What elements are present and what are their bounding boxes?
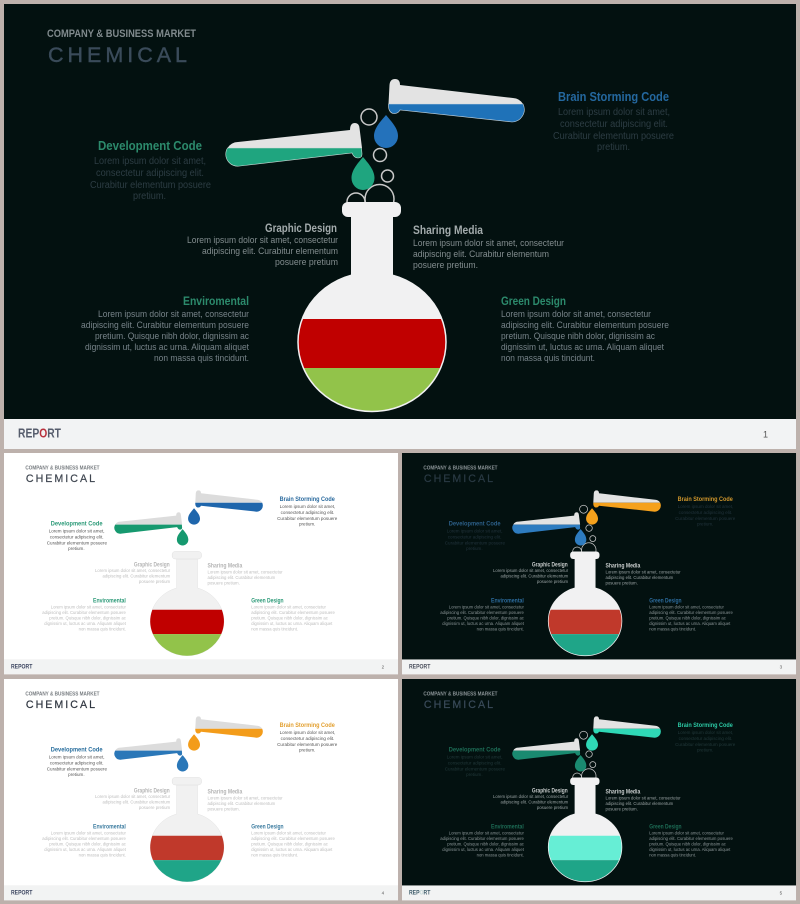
bubbles [573,731,596,783]
label: Enviromental: pretium. Quisque nibh dolor, dignissim ac [447,616,524,622]
footer bar: REPORT [409,664,431,671]
icon: blue test tube [512,512,580,534]
label: Green Design: non massa quis tincidunt. [649,853,696,859]
flask [548,778,622,882]
icon: blue test tube [114,738,182,760]
label: Graphic Design [493,562,569,585]
label: Brain Storming Code: pretium. [597,142,630,153]
label: Green Design: non massa quis tincidunt. [649,627,696,633]
label: Development Code: Development Code [449,747,501,754]
label: Development Code: pretium. [68,772,85,778]
icon: light teal test tube [593,716,661,738]
label: Green Design: dignissim ut, luctus ac urna. Aliquam aliquet [501,342,664,353]
label: Brain Storming Code: consectetur adipiscing elit. [560,119,668,130]
label: Sharing Media: Lorem ipsum dolor sit amet, consectetur [207,569,283,575]
label: Development Code: Curabitur elementum posuere [47,767,107,773]
label: Sharing Media: adipiscing elit. Curabitur elementum [207,801,275,807]
label: Enviromental [42,825,126,859]
label: Development Code [445,747,505,778]
icon: green drop [352,157,374,190]
label: Sharing Media: Lorem ipsum dolor sit amet, consectetur [605,569,681,575]
flask [298,202,446,412]
label: Green Design [251,825,335,859]
label: Sharing Media [413,223,564,271]
label: Sharing Media: posuere pretium. [207,806,240,812]
label: Graphic Design: posuere pretium [537,805,568,811]
title: CHEMICAL [48,43,187,67]
label: Enviromental: dignissim ut, luctus ac urna. Aliquam aliquet [442,847,524,853]
label: Graphic Design: posuere pretium [537,579,568,585]
subtitle: COMPANY & BUSINESS MARKET [423,465,498,471]
label: Development Code: Development Code [98,139,202,153]
flask [150,778,224,882]
slide background [4,679,398,885]
label: Graphic Design: Graphic Design [134,788,170,794]
title: CHEMICAL [26,699,95,711]
icon: blue test tube [195,490,263,512]
footer bar: 4 [382,891,385,896]
label: Brain Storming Code: consectetur adipiscing elit. [679,510,732,516]
label: Enviromental [440,825,524,859]
label: Enviromental: Lorem ipsum dolor sit amet, consectetur [449,831,524,837]
label: Enviromental: Enviromental [93,825,126,831]
label: Green Design: adipiscing elit. Curabitur elementum posuere [649,836,733,842]
label: Green Design: non massa quis tincidunt. [251,853,298,859]
label: Sharing Media [207,789,283,812]
label: Graphic Design [95,788,171,811]
label: Graphic Design: adipiscing elit. Curabitur elementum [501,573,568,579]
label: Enviromental: Lorem ipsum dolor sit amet, consectetur [449,605,524,611]
label: Brain Storming Code: Brain Storming Code [558,90,669,104]
label: Graphic Design: Graphic Design [134,562,170,568]
label: Enviromental: Lorem ipsum dolor sit amet, consectetur [51,831,126,837]
footer bar [4,419,796,449]
label: Development Code: consectetur adipiscing elit. [50,761,104,767]
label: Enviromental: non massa quis tincidunt. [79,627,126,633]
label: Sharing Media: adipiscing elit. Curabitur elementum [413,249,549,260]
label: Brain Storming Code [553,90,674,153]
title: CHEMICAL [26,473,95,485]
label: Graphic Design: posuere pretium [275,257,338,268]
label: Enviromental: non massa quis tincidunt. [79,853,126,859]
label: Green Design [251,599,335,633]
label: Brain Storming Code: Brain Storming Code [678,722,733,729]
label: Brain Storming Code: pretium. [697,748,713,754]
label: Graphic Design: adipiscing elit. Curabitur elementum [202,246,338,257]
bubbles [573,505,596,557]
label: Sharing Media [605,789,681,812]
label: Graphic Design: Lorem ipsum dolor sit amet, consectetur [95,794,171,800]
title: CHEMICAL [424,699,493,711]
label: Brain Storming Code: Lorem ipsum dolor sit amet, [678,504,733,510]
icon: orange test tube [593,490,661,512]
label: Enviromental: adipiscing elit. Curabitur elementum posuere [42,836,126,842]
footer bar: 2 [382,665,385,670]
label: Enviromental: Enviromental [93,599,126,605]
label: Enviromental [42,599,126,633]
label: Enviromental: pretium. Quisque nibh dolor, dignissim ac [95,331,249,342]
label: Brain Storming Code [277,496,338,528]
label: Enviromental: Enviromental [491,825,524,831]
label: Enviromental: adipiscing elit. Curabitur elementum posuere [440,610,524,616]
label: Development Code: pretium. [466,772,483,778]
label: Enviromental: non massa quis tincidunt. [477,853,524,859]
icon: blue drop [575,529,586,546]
label: Development Code: Lorem ipsum dolor sit amet, [94,156,206,167]
label: Development Code: pretium. [133,191,166,202]
label: Graphic Design: posuere pretium [139,805,170,811]
label: Graphic Design: Lorem ipsum dolor sit amet, consectetur [493,568,569,574]
label: Green Design: dignissim ut, luctus ac urna. Aliquam aliquet [649,621,731,627]
label: Enviromental: Lorem ipsum dolor sit amet, consectetur [98,309,249,320]
label: Green Design: Green Design [649,825,682,831]
label: Sharing Media: Sharing Media [605,563,641,569]
label: Development Code [47,521,107,552]
footer bar [402,885,796,900]
label: Sharing Media: Lorem ipsum dolor sit amet, consectetur [413,238,564,249]
label: Enviromental: dignissim ut, luctus ac urna. Aliquam aliquet [442,621,524,627]
subtitle: COMPANY & BUSINESS MARKET [25,465,100,471]
label: Green Design: pretium. Quisque nibh dolor, dignissim ac [649,842,726,848]
label: Enviromental: dignissim ut, luctus ac urna. Aliquam aliquet [85,342,249,353]
label: Development Code: Lorem ipsum dolor sit amet, [447,755,502,761]
icon: blue drop [177,755,188,772]
icon: blue test tube [388,79,524,122]
label: Brain Storming Code: pretium. [299,522,315,528]
label: Sharing Media: Sharing Media [413,223,483,237]
label: Green Design: pretium. Quisque nibh dolor, dignissim ac [251,616,328,622]
label: Development Code: Development Code [51,521,103,528]
subtitle: COMPANY & BUSINESS MARKET [25,691,100,697]
slide background [4,4,796,419]
label: Graphic Design: Lorem ipsum dolor sit amet, consectetur [95,568,171,574]
label: Enviromental: non massa quis tincidunt. [154,353,249,364]
flask [150,552,224,656]
label: Development Code: Curabitur elementum posuere [445,767,505,773]
label: Green Design: Green Design [251,599,284,605]
label: Brain Storming Code: Curabitur elementum posuere [675,742,736,748]
icon: orange drop [586,508,598,525]
label: Enviromental: adipiscing elit. Curabitur elementum posuere [42,610,126,616]
label: Graphic Design: Lorem ipsum dolor sit amet, consectetur [493,794,569,800]
label: Development Code: Curabitur elementum posuere [47,541,107,547]
icon: green drop [177,529,188,546]
label: Brain Storming Code: Brain Storming Code [280,496,335,503]
label: Brain Storming Code [277,722,338,754]
label: Graphic Design: Graphic Design [265,221,337,235]
label: Development Code: Development Code [449,521,501,528]
slide 2: light [4,453,398,674]
icon: blue drop [188,508,200,525]
label: Green Design: adipiscing elit. Curabitur elementum posuere [649,610,733,616]
label: Enviromental [440,599,524,633]
label: Sharing Media: Sharing Media [207,563,243,569]
label: Graphic Design: adipiscing elit. Curabitur elementum [501,799,568,805]
label: Green Design: dignissim ut, luctus ac urna. Aliquam aliquet [251,847,333,853]
label: Enviromental [81,294,249,364]
label: Brain Storming Code: Brain Storming Code [280,722,335,729]
label: Development Code: consectetur adipiscing elit. [448,535,502,541]
label: Sharing Media: Lorem ipsum dolor sit amet, consectetur [207,795,283,801]
label: Graphic Design: Graphic Design [532,562,568,568]
subtitle: COMPANY & BUSINESS MARKET [423,691,498,697]
label: Brain Storming Code: Curabitur elementum posuere [277,742,338,748]
label: Green Design: non massa quis tincidunt. [251,627,298,633]
label: Development Code [445,521,505,552]
label: Brain Storming Code [675,722,736,754]
label: Brain Storming Code [675,496,736,528]
slide 4: light orange and blue [4,679,398,900]
label: Graphic Design: Graphic Design [532,788,568,794]
label: Graphic Design [187,221,338,268]
label: Green Design [649,599,733,633]
label: Sharing Media: Sharing Media [207,789,243,795]
footer bar [4,659,398,674]
icon: green test tube [114,512,182,534]
label: Sharing Media: posuere pretium. [413,260,478,271]
label: Brain Storming Code: pretium. [697,522,713,528]
label: Brain Storming Code: Lorem ipsum dolor sit amet, [280,730,335,736]
subtitle: COMPANY & BUSINESS MARKET [47,28,196,40]
label: Brain Storming Code: consectetur adipiscing elit. [281,736,334,742]
label: Development Code: pretium. [68,546,85,552]
label: Brain Storming Code: pretium. [299,748,315,754]
label: Sharing Media: posuere pretium. [605,580,638,586]
label: Enviromental: adipiscing elit. Curabitur elementum posuere [440,836,524,842]
label: Sharing Media: adipiscing elit. Curabitur elementum [605,801,673,807]
label: Sharing Media: posuere pretium. [605,806,638,812]
label: Brain Storming Code: consectetur adipiscing elit. [281,510,334,516]
footer bar: REPORT [11,664,33,671]
label: Enviromental: dignissim ut, luctus ac urna. Aliquam aliquet [44,621,126,627]
label: Green Design: dignissim ut, luctus ac urna. Aliquam aliquet [649,847,731,853]
icon: orange test tube [195,716,263,738]
label: Green Design: Lorem ipsum dolor sit amet, consectetur [649,831,724,837]
label: Sharing Media: posuere pretium. [207,580,240,586]
label: Green Design [501,294,669,364]
label: Green Design: pretium. Quisque nibh dolor, dignissim ac [251,842,328,848]
icon: dark teal drop [575,755,586,772]
label: Green Design: pretium. Quisque nibh dolor, dignissim ac [649,616,726,622]
label: Enviromental: pretium. Quisque nibh dolor, dignissim ac [49,616,126,622]
label: Green Design [649,825,733,859]
label: Enviromental: pretium. Quisque nibh dolor, dignissim ac [49,842,126,848]
slide 5: dark teal [402,679,796,900]
label: Brain Storming Code: consectetur adipiscing elit. [679,736,732,742]
label: Green Design: dignissim ut, luctus ac urna. Aliquam aliquet [251,621,333,627]
footer bar [402,659,796,674]
label: Green Design: non massa quis tincidunt. [501,353,595,364]
label: Graphic Design: Lorem ipsum dolor sit amet, consectetur [187,235,338,246]
slide background [402,679,796,885]
label: Enviromental: Enviromental [491,599,524,605]
label: Development Code [47,747,107,778]
icon: orange drop [188,734,200,751]
icon: light teal drop [586,734,598,751]
label: Enviromental: pretium. Quisque nibh dolor, dignissim ac [447,842,524,848]
label: Development Code: consectetur adipiscing elit. [448,761,502,767]
footer bar: 3 [780,665,783,670]
label: Green Design: Green Design [649,599,682,605]
label: Brain Storming Code: Lorem ipsum dolor sit amet, [678,730,733,736]
slide background [4,453,398,659]
title: CHEMICAL [424,473,493,485]
slide 3: dark orange and blue [402,453,796,674]
label: Brain Storming Code: Curabitur elementum posuere [277,516,338,522]
bubbles [347,109,394,214]
label: Graphic Design: posuere pretium [139,579,170,585]
footer bar: REPORT [18,426,61,440]
icon: green test tube [226,123,362,166]
label: Green Design: adipiscing elit. Curabitur elementum posuere [501,320,669,331]
footer bar: REPORT [409,890,431,897]
footer bar: REPORT [11,890,33,897]
label: Development Code: consectetur adipiscing elit. [96,168,204,179]
label: Green Design: adipiscing elit. Curabitur elementum posuere [251,610,335,616]
label: Sharing Media: Sharing Media [605,789,641,795]
label: Development Code: Lorem ipsum dolor sit amet, [447,529,502,535]
label: Enviromental: Enviromental [183,294,249,308]
footer bar: 1 [763,430,768,440]
label: Brain Storming Code: Lorem ipsum dolor sit amet, [280,504,335,510]
label: Brain Storming Code: Curabitur elementum posuere [675,516,736,522]
label: Graphic Design: adipiscing elit. Curabitur elementum [103,799,170,805]
icon: dark teal test tube [512,738,580,760]
label: Sharing Media [207,563,283,586]
label: Enviromental: adipiscing elit. Curabitur elementum posuere [81,320,249,331]
label: Green Design: pretium. Quisque nibh dolor, dignissim ac [501,331,655,342]
label: Sharing Media [605,563,681,586]
slide 1: dark large [4,4,796,449]
label: Graphic Design: adipiscing elit. Curabitur elementum [103,573,170,579]
label: Sharing Media: adipiscing elit. Curabitur elementum [605,575,673,581]
label: Green Design: Lorem ipsum dolor sit amet, consectetur [501,309,651,320]
label: Green Design: Green Design [251,825,284,831]
label: Enviromental: Lorem ipsum dolor sit amet, consectetur [51,605,126,611]
label: Green Design: Lorem ipsum dolor sit amet, consectetur [649,605,724,611]
label: Sharing Media: Lorem ipsum dolor sit amet, consectetur [605,795,681,801]
label: Sharing Media: adipiscing elit. Curabitur elementum [207,575,275,581]
label: Development Code: Lorem ipsum dolor sit amet, [49,755,104,761]
footer bar [4,885,398,900]
label: Green Design: Lorem ipsum dolor sit amet, consectetur [251,605,326,611]
label: Development Code: pretium. [466,546,483,552]
label: Development Code: Development Code [51,747,103,754]
label: Development Code: Curabitur elementum posuere [90,180,211,191]
label: Green Design: adipiscing elit. Curabitur elementum posuere [251,836,335,842]
label: Brain Storming Code: Lorem ipsum dolor sit amet, [558,107,670,118]
label: Development Code: Curabitur elementum posuere [445,541,505,547]
label: Brain Storming Code: Brain Storming Code [678,496,733,503]
flask [548,552,622,656]
label: Enviromental: dignissim ut, luctus ac urna. Aliquam aliquet [44,847,126,853]
slide background [402,453,796,659]
label: Green Design: Green Design [501,294,566,308]
label: Development Code: Lorem ipsum dolor sit amet, [49,529,104,535]
footer bar: 5 [780,891,783,896]
icon: blue drop [374,115,398,148]
label: Development Code [90,139,211,202]
label: Graphic Design [493,788,569,811]
label: Enviromental: non massa quis tincidunt. [477,627,524,633]
label: Green Design: Lorem ipsum dolor sit amet, consectetur [251,831,326,837]
label: Brain Storming Code: Curabitur elementum posuere [553,131,674,142]
label: Graphic Design [95,562,171,585]
label: Development Code: consectetur adipiscing elit. [50,535,104,541]
